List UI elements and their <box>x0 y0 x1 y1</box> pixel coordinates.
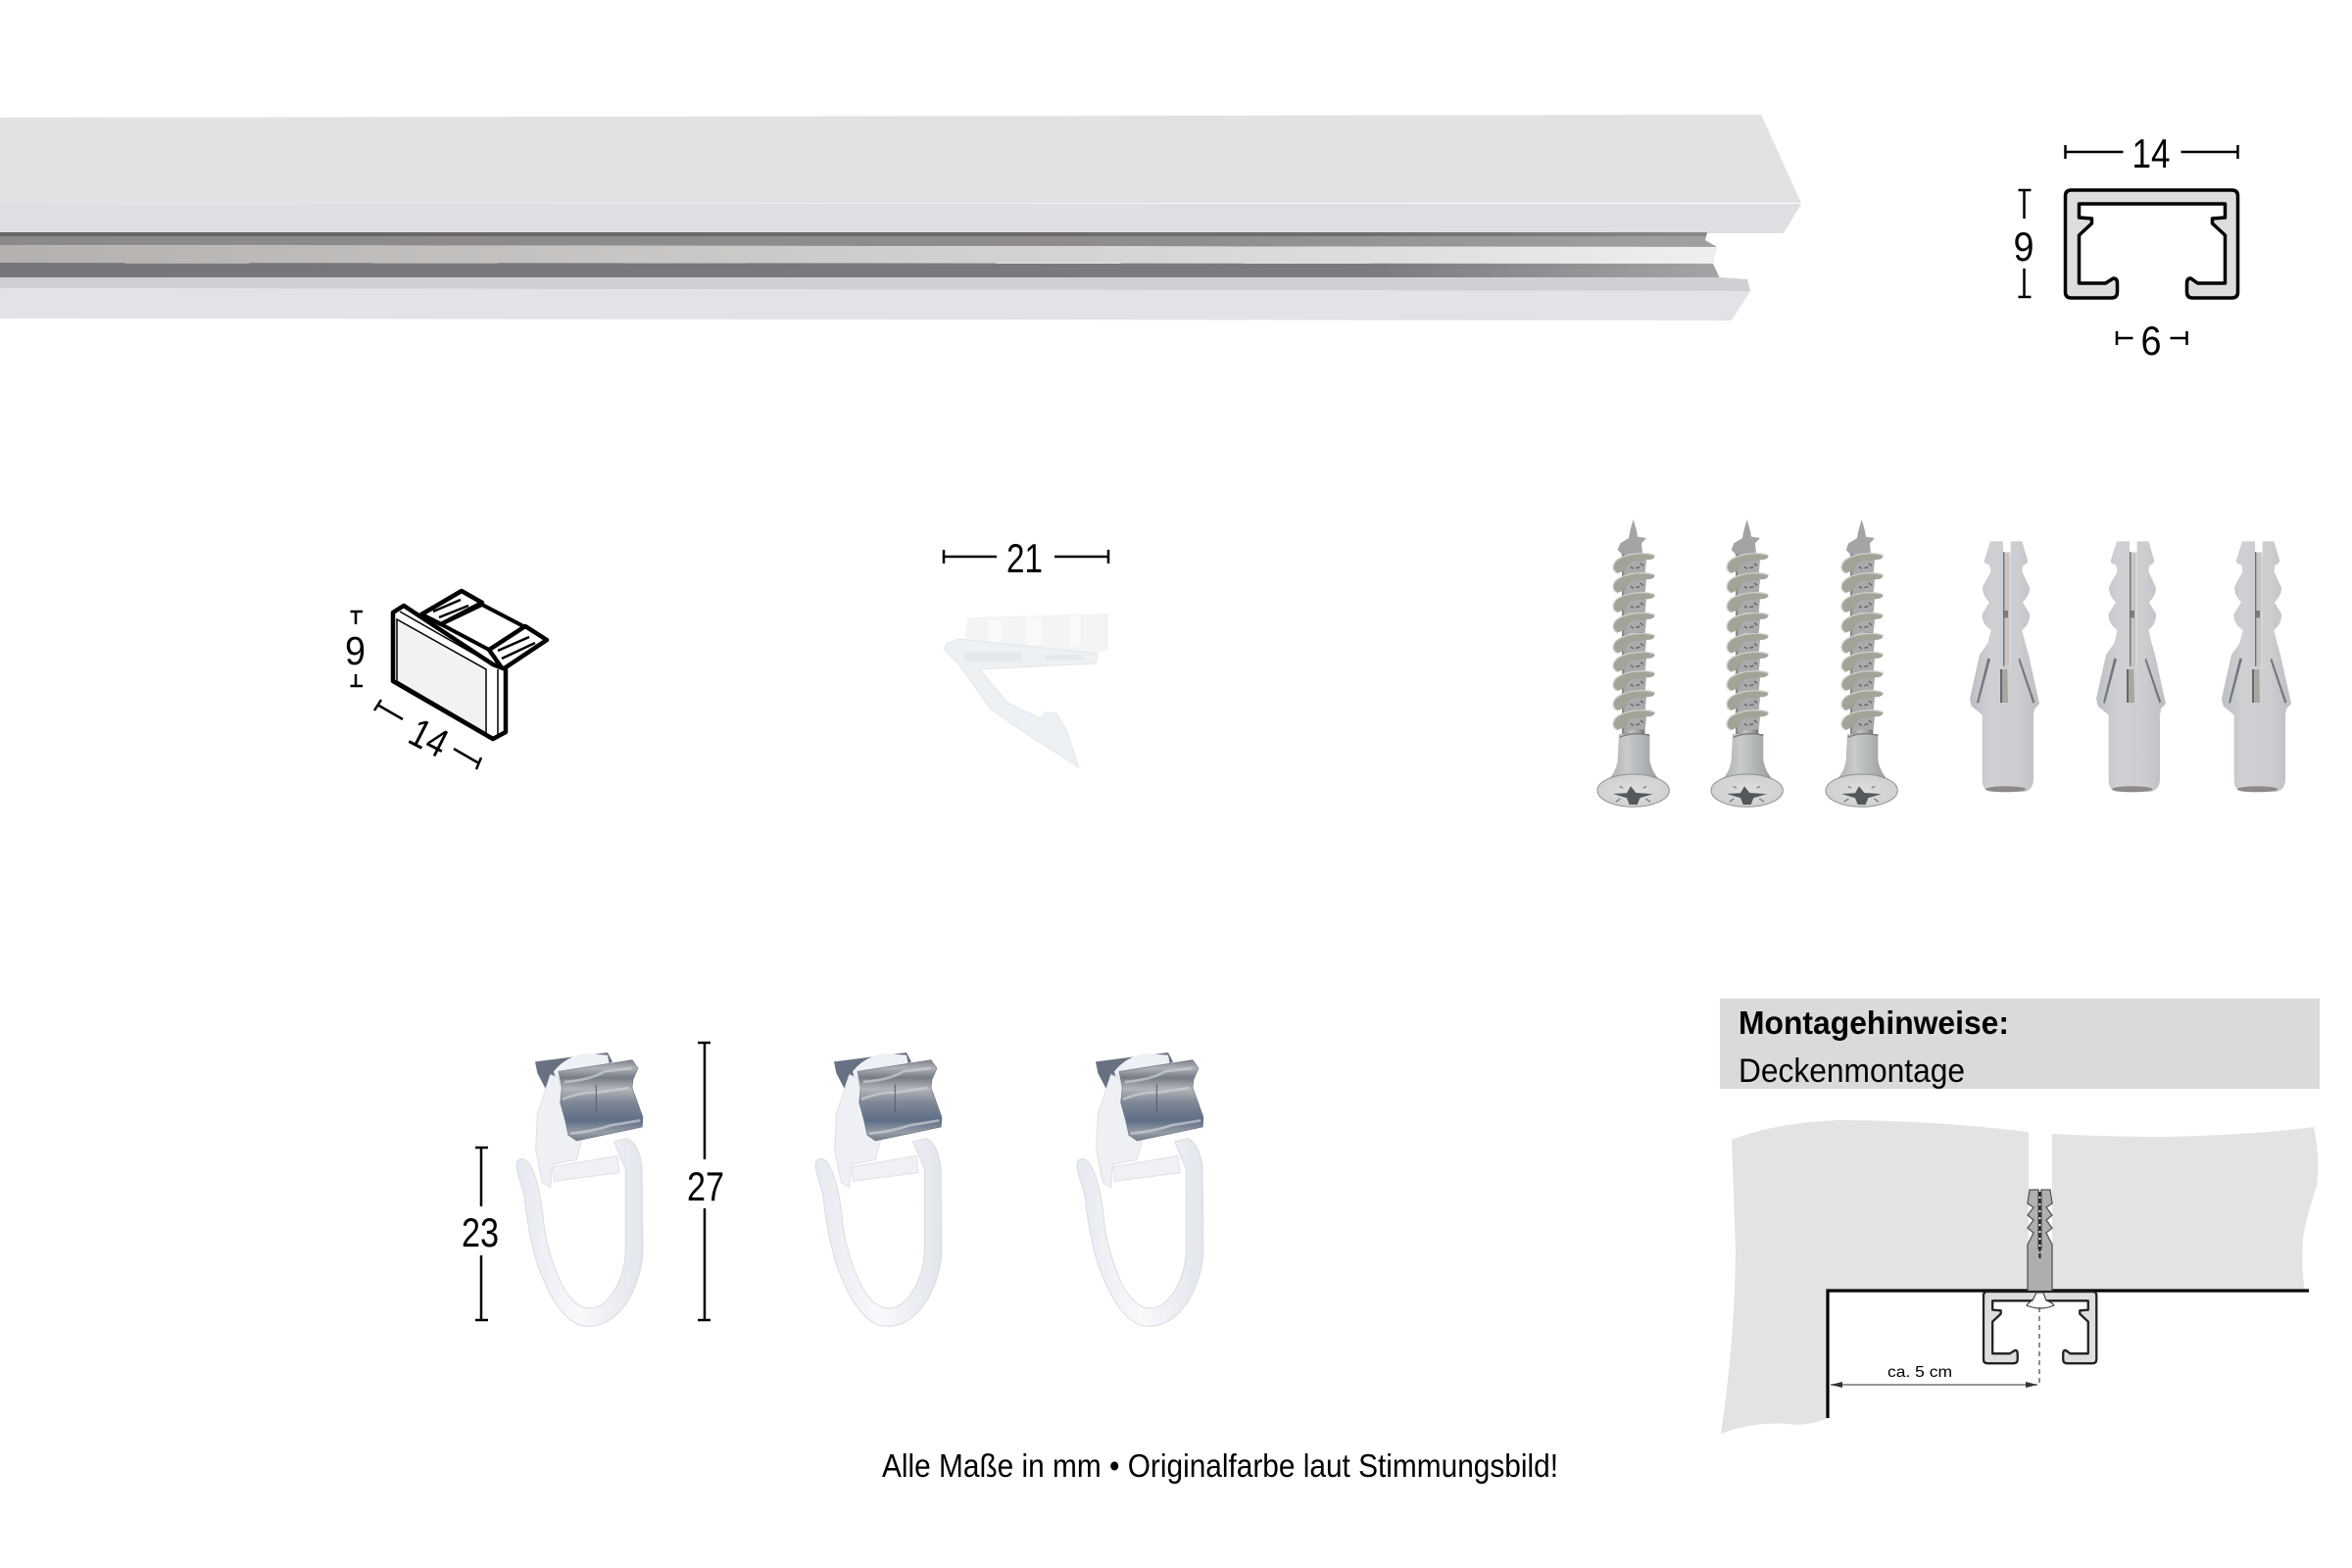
dimension: height 9 <box>2013 190 2034 297</box>
screw 1 <box>1597 519 1669 807</box>
transparent end clip with dimension <box>944 535 1108 767</box>
rail lower lip <box>0 277 1750 291</box>
wall plug 1 <box>1970 540 2039 792</box>
mini wall plug in ceiling <box>2028 1190 2052 1291</box>
dimension: total 27 <box>687 1043 724 1320</box>
dimension: width 14: 14 <box>402 710 456 766</box>
end cap body <box>393 606 506 739</box>
footer note: Alle Maße in mm • Originalfarbe laut Stimmungsbild! <box>882 1447 1558 1484</box>
rail upper front face <box>0 204 1801 233</box>
dimension: height 9 <box>345 612 366 686</box>
ceiling edge line <box>1828 1291 2309 1418</box>
curtain glider 3 <box>1077 1053 1203 1326</box>
wall plug 2 <box>2096 540 2166 792</box>
panel: mounting instructions <box>1720 999 2320 1434</box>
clip body <box>944 613 1108 767</box>
dimension: ca. 5 cm <box>1831 1364 2037 1388</box>
dimension: width 14 <box>374 700 481 769</box>
end cap tab inner marks <box>433 600 535 659</box>
dimension: total 27: 27 <box>687 1163 724 1209</box>
mini rail profile <box>1984 1292 2096 1363</box>
screw head <box>2027 1293 2054 1308</box>
curtain glider 1 with dimensions <box>462 1043 724 1326</box>
screws <box>1597 519 1897 807</box>
profile shape <box>2066 190 2238 298</box>
rail top face <box>0 115 1801 204</box>
rail lower front face <box>0 288 1750 320</box>
end cap tab: centre <box>441 605 525 650</box>
dimension: height 9: 9 <box>345 628 366 673</box>
rail: ceiling track product photo <box>0 115 1801 320</box>
end cap tab: left knob <box>421 591 482 624</box>
rail groove shadow line <box>0 232 1707 236</box>
wall plug 3 <box>2222 540 2291 792</box>
dimension: ca. 5 cm: ca. 5 cm <box>1887 1364 1952 1381</box>
dimension: hook 23: 23 <box>462 1209 499 1255</box>
wall plugs <box>1970 540 2291 792</box>
dimension: width 14 <box>2066 130 2238 176</box>
rail lower groove <box>0 263 1720 278</box>
dimension: width 14: 14 <box>2132 130 2170 176</box>
end cap with dimensions <box>345 591 547 769</box>
dimension: width 21 <box>944 535 1108 581</box>
dimension: height 9: 9 <box>2013 223 2034 270</box>
panel header band <box>1720 999 2320 1090</box>
panel header band: Deckenmontage <box>1739 1053 1965 1090</box>
ceiling left section <box>1721 1120 2029 1434</box>
dimension: slot 6 <box>2117 318 2187 364</box>
dimension: hook 23 <box>462 1148 499 1320</box>
dimension: width 21: 21 <box>1006 535 1043 581</box>
dimension: slot 6: 6 <box>2140 318 2162 364</box>
rail reflective strip <box>0 245 1717 264</box>
screw 2 <box>1711 519 1783 807</box>
screw 3 <box>1826 519 1897 807</box>
profile cross-section with dimensions <box>2013 130 2238 364</box>
curtain glider 2 <box>815 1053 942 1326</box>
rail upper groove <box>0 232 1717 247</box>
panel header band: Montagehinweise: <box>1739 1004 2009 1041</box>
end cap tab: right knob <box>489 626 547 669</box>
ceiling right section <box>2052 1127 2318 1291</box>
centre dashed line <box>2038 1307 2040 1387</box>
